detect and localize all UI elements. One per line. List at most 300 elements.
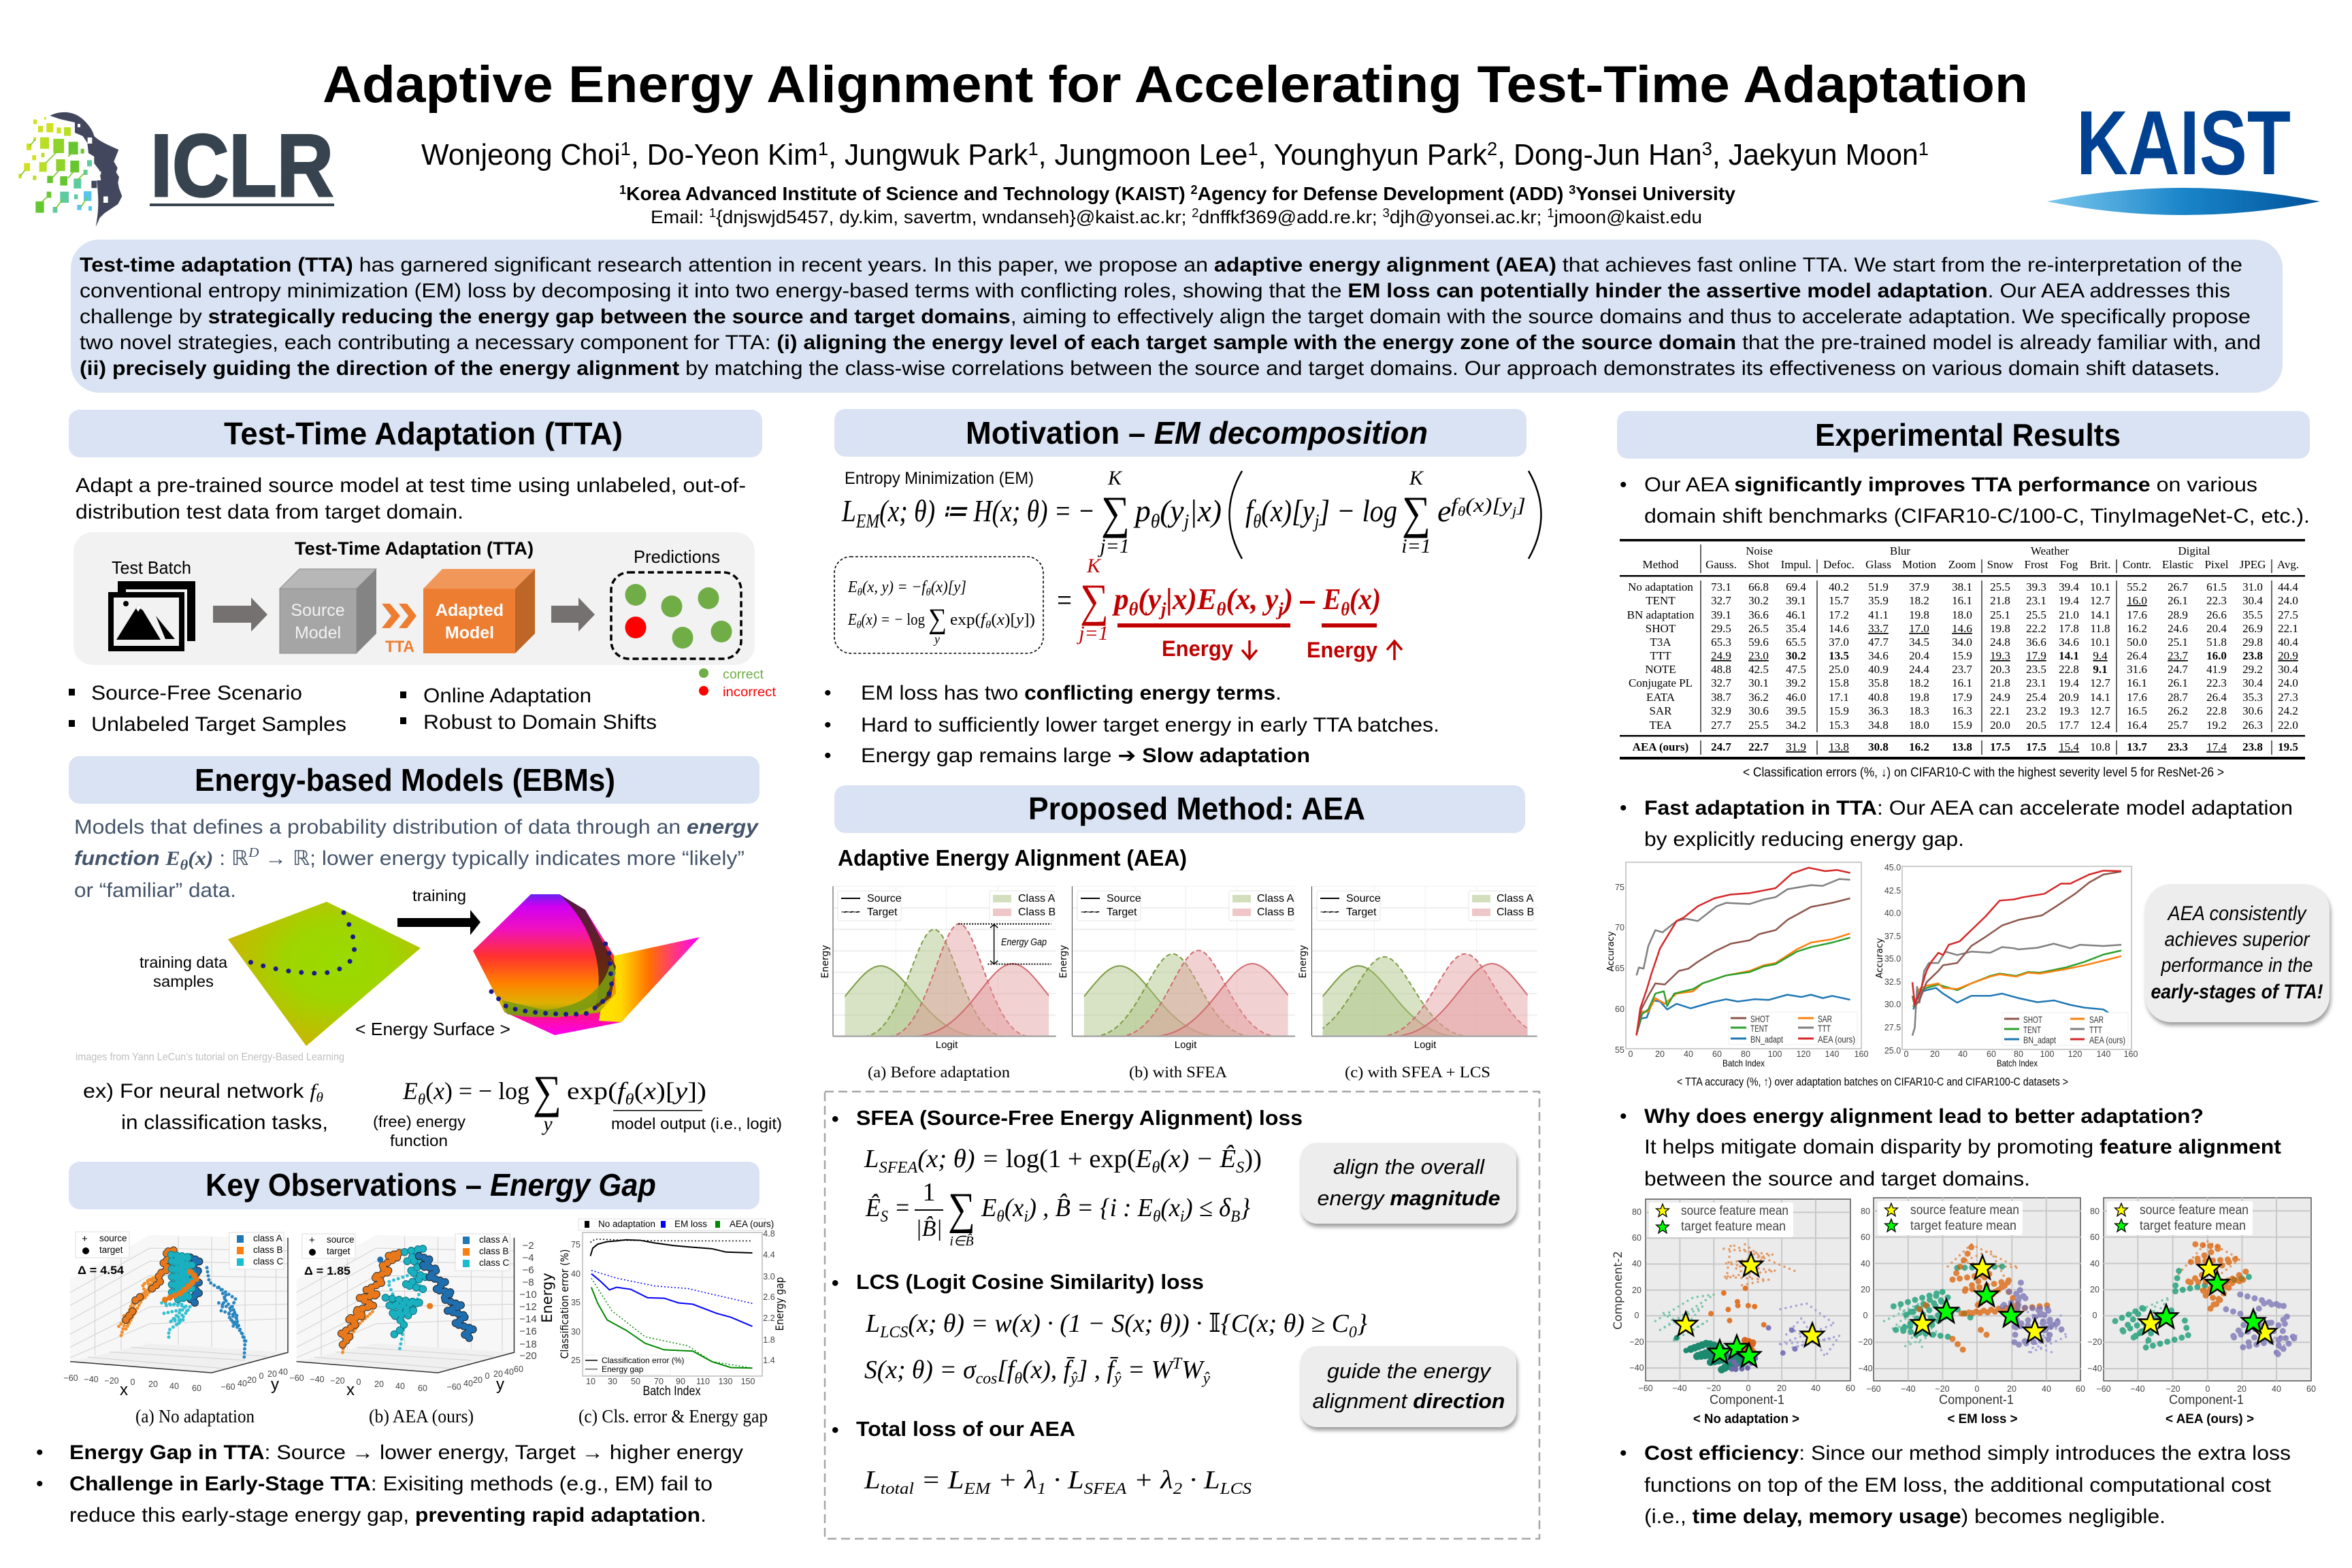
- formula: source energy estimate: Ê: [866, 1194, 881, 1222]
- legends: chart c: Class B: [1497, 906, 1534, 918]
- table: classification errors: 39.1: [1786, 594, 1806, 607]
- formula: decomposition in red: θ: [1129, 599, 1138, 619]
- table: classification errors: 17.9: [1952, 691, 1972, 704]
- formula: LCS loss: LCS: [879, 1324, 908, 1341]
- table: classification errors: Weather: [2031, 544, 2069, 557]
- table: classification errors: Digital: [2178, 544, 2210, 557]
- subheading: AEA: Adaptive Energy Alignment (AEA): [838, 845, 1187, 870]
- axis labels: [558, 1229, 786, 1399]
- formula: source energy estimate: }: [1240, 1194, 1250, 1222]
- heading: EBMs: Energy-based Models (EBMs): [195, 762, 615, 798]
- authors: , Jungmoon Lee: [1039, 138, 1247, 172]
- authors: , Dong-Jun Han: [1497, 138, 1702, 172]
- formula: SFEA loss: )): [1244, 1145, 1262, 1173]
- legend: target feature mean: [1681, 1220, 1786, 1234]
- list: key observations: Energy Gap in TTA : Source → lower energy, Target → higher energy: [69, 1441, 743, 1464]
- chart: feature scatter no adaptation: [1612, 1199, 1855, 1426]
- table: classification errors: 12.7: [2090, 676, 2110, 689]
- emails: dnffkf369@add.re.kr;: [1199, 207, 1382, 227]
- table: classification errors: 23.7: [1952, 663, 1972, 676]
- formula: EM loss: (x; θ) ≔ H(x; θ) = −: [879, 493, 1095, 528]
- formula: source energy estimate: ∑: [948, 1184, 975, 1234]
- heading: EBMs: [69, 756, 760, 804]
- axis labels: [1606, 883, 1868, 1068]
- table: classification errors: 17.4: [2206, 740, 2227, 753]
- table: classification errors: 65.5: [1786, 636, 1806, 649]
- table: classification errors: 35.4: [1786, 622, 1806, 635]
- table: classification errors: 10.1: [2090, 581, 2110, 593]
- axis ticks: 0: [485, 1371, 490, 1381]
- table: classification errors: 29.2: [2242, 663, 2263, 676]
- text: example: θ: [316, 1090, 323, 1105]
- table: classification errors: 20.9: [2059, 691, 2079, 704]
- legends: chart c: Target: [1346, 906, 1377, 918]
- axis labels: 40: [1811, 1384, 1820, 1393]
- axis labels: 0: [1629, 1049, 1633, 1059]
- formula: total loss: 2: [1173, 1480, 1182, 1498]
- axis ticks: y: [271, 1375, 279, 1394]
- affiliations: 3: [1569, 183, 1575, 197]
- text: SFEA heading: •: [832, 1108, 839, 1130]
- axis ticks: 0: [259, 1371, 264, 1381]
- table: classification errors: 34.0: [1952, 636, 1972, 649]
- formula: LCS loss: 0: [1349, 1324, 1357, 1341]
- formula: source energy estimate: i: [1180, 1208, 1184, 1226]
- title: Adaptive Energy Alignment for Accelerating Test-Time Adaptation: [323, 56, 2028, 114]
- formula: total loss: total: [881, 1480, 914, 1498]
- axis labels: 140: [1825, 1049, 1839, 1059]
- authors: 1: [818, 138, 828, 159]
- table: classification errors: 19.8: [1909, 608, 1929, 621]
- axis ticks: 40: [169, 1382, 179, 1391]
- table: classification errors: 21.0: [2059, 608, 2079, 621]
- arrow: training: [397, 887, 480, 935]
- table: classification errors: 16.1: [1952, 594, 1972, 607]
- text: cost efficiency: Cost efficiency : Since our method simply introduces the extra loss: [1644, 1442, 2291, 1465]
- axis labels: 0: [1975, 1384, 1980, 1394]
- text: total loss heading: Total loss of our AEA: [856, 1417, 1075, 1441]
- table: classification errors: 19.8: [1909, 691, 1929, 704]
- table: classification errors: 15.3: [1829, 719, 1849, 732]
- formula: EM loss: θ: [1151, 511, 1160, 532]
- formula: EM loss: ] − log: [1318, 493, 1397, 528]
- legend: source target: source: [99, 1233, 127, 1243]
- heading: experimental results: Experimental Results: [1815, 417, 2121, 453]
- axis labels: 0: [1904, 1049, 1909, 1059]
- legend: source feature mean: [2140, 1203, 2249, 1218]
- table: classification errors: 25.1: [2168, 636, 2188, 649]
- panel: abstract: (ii) precisely guiding the direction of the energy alignment by matching the class-wise correlations between the source and target domains. Our approach demonstrates its effectiveness on various domain shift datasets.: [80, 357, 2220, 380]
- formula: EM loss: i=1: [1401, 535, 1431, 557]
- authors: 1: [1918, 138, 1929, 159]
- list: TTA properties: Source-Free Scenario: [91, 682, 302, 704]
- table: classification errors: Blur: [1890, 544, 1910, 557]
- heading: proposed method: Proposed Method: AEA: [1028, 791, 1365, 826]
- icon: source model cube: Source: [291, 601, 345, 620]
- formula: SFEA loss: SFEA: [879, 1159, 918, 1177]
- authors: 1: [1028, 138, 1039, 159]
- formula: energy function: (: [425, 1077, 434, 1105]
- formula: EM loss: [841, 467, 1541, 559]
- axis labels: Accuracy: [1875, 938, 1885, 979]
- axis labels: Classification error (%): [558, 1250, 571, 1358]
- legends: chart c: Class A: [1497, 893, 1534, 904]
- formula: EM loss: p: [1135, 493, 1151, 528]
- captions: key observations figures: (a) No adaptation: [135, 1406, 255, 1426]
- panel: Experimental Results: [1606, 411, 2330, 1528]
- table: classification errors: TTT: [1650, 649, 1671, 662]
- formula: EM loss: ∑: [1101, 487, 1130, 538]
- axis labels: 80: [1861, 1207, 1870, 1216]
- callout: direction: [1301, 1346, 1516, 1427]
- table: classification errors: 15.4: [2059, 740, 2079, 753]
- table: classification errors: NOTE: [1645, 663, 1676, 676]
- box: energy definitions: θ: [857, 619, 862, 631]
- formula: cosine similarity: W: [1181, 1356, 1205, 1384]
- affiliations: 2: [1190, 183, 1198, 197]
- panel: Test-Time Adaptation: [69, 410, 777, 736]
- legend: BN_adapt: [2023, 1034, 2056, 1045]
- emails: 1: [709, 206, 716, 220]
- callout: early stages: early-stages of TTA!: [2151, 981, 2323, 1003]
- table: classification errors: 26.4: [2206, 691, 2227, 704]
- box: energy definitions: θ: [985, 619, 991, 631]
- captions: (c) with SFEA + LCS: [1345, 1064, 1490, 1081]
- axis labels: 140: [2097, 1049, 2110, 1059]
- text: fast adaptation: [1620, 797, 2293, 851]
- axis ticks: 40: [395, 1382, 405, 1391]
- table: classification errors: Conjugate PL: [1629, 676, 1693, 689]
- formula: energy function: model output (i.e., logit): [611, 1115, 782, 1132]
- axis labels: 30.0: [1884, 1000, 1901, 1009]
- table: classification errors: 30.4: [2242, 676, 2263, 689]
- logo: KAIST: [2047, 93, 2320, 215]
- formula: energy function: function: [390, 1132, 448, 1149]
- legend: classes: class B: [253, 1245, 283, 1255]
- axis labels: 40: [1632, 1259, 1642, 1269]
- formula: EM loss: K: [1107, 467, 1123, 489]
- formula: energy function: y: [541, 1113, 553, 1135]
- text: cost efficiency: (i.e., time delay, memory usage ) becomes negligible.: [1644, 1505, 2166, 1528]
- panel: loss definitions: [825, 1092, 1539, 1539]
- axis ticks: 0: [357, 1377, 361, 1387]
- axis labels: 60: [2076, 1384, 2085, 1394]
- axis labels: 40: [1684, 1049, 1693, 1059]
- text: example: ex) For neural network f: [83, 1080, 316, 1102]
- emails: djh@yonsei.ac.kr;: [1390, 207, 1547, 227]
- axis labels: Component-1: [1710, 1393, 1784, 1407]
- chart: 3D scatter no adaptation: [63, 1232, 288, 1399]
- table: classification errors: 69.4: [1786, 581, 1806, 593]
- formula: energy function: ∑: [533, 1066, 561, 1117]
- emails: 3: [1382, 206, 1390, 220]
- table: classification errors: 55.2: [2127, 581, 2147, 593]
- axis labels: −60: [1866, 1384, 1881, 1394]
- axis labels: 65: [1615, 964, 1624, 973]
- captions: key observations figures: (b) AEA (ours): [369, 1406, 474, 1426]
- table: classification errors: 20.9: [2278, 649, 2298, 662]
- table: classification errors: 17.2: [1829, 608, 1849, 621]
- formula: decomposition in red: [1057, 555, 1402, 662]
- legends: chart a: Source: [867, 893, 902, 904]
- formula: LCS loss: (x; θ) = w(x) · (1 − S(x; θ)) ·: [908, 1309, 1209, 1338]
- chart: feature scatter EM loss: [1858, 1198, 2085, 1426]
- formula: source energy estimate: (x: [1004, 1194, 1024, 1222]
- table: classification errors: 20.4: [1909, 649, 1929, 662]
- table: classification errors: 13.8: [1829, 740, 1849, 753]
- axis labels: 4.8: [763, 1229, 775, 1239]
- table: classification errors: 19.4: [2059, 594, 2079, 607]
- caption: table: < Classification errors (%, ↓) on CIFAR10-C with the highest severity level 5 for ResNet-26 >: [1743, 766, 2224, 780]
- table: classification errors: 16.0: [2127, 594, 2147, 607]
- table: classification errors: 10.8: [2090, 740, 2110, 753]
- table: classification errors: 26.2: [2168, 704, 2188, 717]
- callout: magnitude: energy magnitude: [1318, 1186, 1500, 1210]
- authors: , Younghyun Park: [1258, 138, 1488, 172]
- formula: cosine similarity: ŷ: [1201, 1370, 1210, 1388]
- legend: source target: +: [309, 1235, 315, 1246]
- axis labels: < EM loss >: [1948, 1412, 2017, 1426]
- formula: total loss: 1: [1037, 1480, 1046, 1498]
- axis ticks: x: [346, 1381, 355, 1399]
- table: classification errors: 24.8: [1990, 636, 2010, 649]
- icon: TTA chevrons: TTA: [385, 638, 414, 656]
- formula: source energy estimate: =: [888, 1194, 911, 1222]
- axis labels: 37.5: [1884, 932, 1901, 941]
- table: classification errors: 66.8: [1748, 581, 1769, 593]
- axis labels: 60: [1987, 1049, 1996, 1059]
- axis ticks: −2: [522, 1240, 534, 1252]
- axis labels: [1875, 863, 2138, 1068]
- formula: EM loss: f: [1451, 494, 1456, 517]
- table: classification errors: 40.4: [2278, 636, 2298, 649]
- formula: SFEA loss: L: [864, 1145, 879, 1173]
- table: classification errors: Defoc.: [1823, 558, 1855, 571]
- table: classification errors: Snow: [1987, 558, 2014, 571]
- axis ticks: [289, 1240, 555, 1399]
- table: classification errors: 26.5: [1748, 622, 1769, 635]
- table: classification errors: 17.1: [1829, 691, 1849, 704]
- text: TTA definition: Adapt a pre-trained source model at test time using unlabeled, out-of-: [76, 474, 746, 497]
- axis labels: 160: [1855, 1049, 1868, 1059]
- table: classification errors: 47.5: [1786, 663, 1806, 676]
- table: classification errors: 24.7: [1711, 740, 1731, 753]
- table: classification errors: 26.7: [2168, 581, 2188, 593]
- formula: decomposition in red: (x): [1350, 583, 1381, 616]
- table: classification errors: 16.2: [1909, 740, 1929, 753]
- axis labels: 35.0: [1884, 954, 1901, 964]
- table: classification errors: SAR: [1649, 704, 1672, 717]
- text: why energy alignment: [1620, 1105, 2281, 1190]
- legend: correct / incorrect: [699, 668, 777, 700]
- axis labels: 1.8: [763, 1335, 775, 1345]
- table: classification errors: 24.2: [2278, 704, 2298, 717]
- chart group: energy distributions: [821, 886, 1537, 1081]
- table: classification errors: 65.3: [1711, 636, 1731, 649]
- legend: classes: class A: [479, 1235, 508, 1245]
- table: classification errors: 13.7: [2127, 740, 2147, 753]
- text: EBM definition: function E: [74, 847, 179, 870]
- legends: chart b: Source: [1107, 893, 1141, 904]
- table: classification errors: Avg.: [2277, 558, 2299, 571]
- table: classification errors: 16.4: [2127, 719, 2147, 732]
- legend: methods: [578, 1219, 774, 1230]
- table: classification errors: 24.9: [1711, 649, 1731, 662]
- table: classification errors: 34.6: [1868, 649, 1889, 662]
- formula: source energy estimate: θ: [996, 1208, 1004, 1226]
- text: EBM definition: : ℝ: [219, 847, 246, 870]
- list: EM problems: EM loss has two conflicting energy terms .: [861, 682, 1281, 704]
- text: EBM definition: → ℝ; lower energy typically indicates more “likely”: [259, 847, 745, 870]
- list: key observations: [36, 1441, 743, 1526]
- captions: (b) with SFEA: [1129, 1064, 1227, 1081]
- formula: cosine similarity: S(x; θ) = σ: [864, 1356, 977, 1384]
- axis labels: 70: [654, 1377, 664, 1386]
- axis labels: 3.0: [763, 1272, 775, 1281]
- formula: energy function: [373, 1066, 782, 1149]
- axis labels: −20: [1935, 1384, 1950, 1394]
- table: classification errors: Method: [1643, 558, 1679, 571]
- table: classification errors: 27.7: [1711, 719, 1731, 732]
- table: classification errors: Glass: [1865, 558, 1891, 571]
- legend: target feature mean: [1910, 1219, 2016, 1233]
- chart: 3D scatter AEA: [289, 1234, 555, 1399]
- formula: cosine similarity: ] , f̄: [1077, 1356, 1119, 1384]
- axis labels: Component-1: [1939, 1393, 2014, 1407]
- table: classification errors: 59.6: [1748, 636, 1769, 649]
- table: classification errors: TEA: [1649, 719, 1672, 732]
- heading: motivation: [834, 409, 1526, 457]
- formula: EM loss: (x)[y: [1465, 494, 1513, 517]
- table: classification errors: 38.1: [1952, 581, 1972, 593]
- arrow: training: training: [412, 887, 466, 904]
- axis labels: 40: [2090, 1259, 2100, 1269]
- table: classification errors: 35.5: [2242, 608, 2263, 621]
- legend: TTT: [2089, 1024, 2102, 1035]
- arrow: model to predictions: [551, 598, 595, 632]
- table: classification errors: 22.0: [2278, 719, 2298, 732]
- table: classification errors: 31.6: [2127, 663, 2147, 676]
- axis labels: 45.0: [1884, 863, 1901, 872]
- formula: EM loss: θ: [1458, 504, 1466, 519]
- formula: decomposition in red: Energy: [1307, 638, 1377, 662]
- formula: source energy estimate: [865, 1178, 1250, 1249]
- axis labels: 150: [741, 1377, 755, 1386]
- formula: EM loss: j: [1313, 511, 1320, 532]
- box: energy definitions: (: [991, 611, 997, 629]
- table: classification errors: EATA: [1646, 691, 1676, 704]
- table: classification errors: 23.2: [2026, 704, 2046, 717]
- formula: EM loss: f: [1245, 493, 1254, 528]
- formula: decomposition in red: j: [1158, 599, 1166, 619]
- table: classification errors: 32.7: [1711, 676, 1731, 689]
- axis labels: 110: [696, 1377, 710, 1386]
- legend: source target: +: [82, 1233, 88, 1245]
- table: classification errors: 20.5: [2026, 719, 2046, 732]
- formula: EM loss: j=1: [1097, 535, 1130, 557]
- table: classification errors: 30.8: [1868, 740, 1889, 753]
- text: EBM definition: [74, 816, 759, 902]
- table: classification errors: 16.2: [2127, 622, 2147, 635]
- chart: 3D scatter no adaptation: Δ = 4.54: [78, 1264, 125, 1277]
- table: classification errors: JPEG: [2240, 558, 2266, 571]
- legend: methods: No adaptation: [598, 1219, 655, 1229]
- text: why energy alignment: It helps mitigate domain disparity by promoting feature alignment: [1644, 1136, 2281, 1158]
- table: classification errors: 23.8: [2242, 740, 2263, 753]
- chart: CIFAR100-C accuracy: [1875, 863, 2138, 1068]
- table: classification errors: 17.5: [1990, 740, 2010, 753]
- axis labels: −40: [1672, 1384, 1687, 1393]
- formula: source energy estimate: θ: [1153, 1208, 1161, 1226]
- legends: chart b: Class B: [1257, 906, 1294, 918]
- formula: source energy estimate: ) ≤ δ: [1183, 1194, 1231, 1222]
- callout: early stages: AEA consistently: [2167, 902, 2307, 925]
- table: classification errors: 24.0: [2278, 594, 2298, 607]
- box: energy definitions: θ: [926, 587, 931, 598]
- formula: total loss: L: [864, 1466, 879, 1494]
- text: why energy alignment: Why does energy alignment lead to better adaptation?: [1644, 1105, 2204, 1128]
- axis labels: [2087, 1207, 2316, 1426]
- legend: source feature mean: [1681, 1204, 1788, 1218]
- table: classification errors: 12.7: [2090, 594, 2110, 607]
- table: classification errors: 24.6: [2168, 622, 2188, 635]
- formula: total loss: = L: [914, 1466, 964, 1494]
- image: flat energy surface: [228, 902, 421, 1046]
- table: classification errors: 17.5: [2026, 740, 2046, 753]
- legends: chart c: [1317, 891, 1534, 921]
- affiliations: Agency for Defense Development (ADD): [1198, 183, 1569, 204]
- heading: key observations: Key Observations – Energy Gap: [206, 1167, 656, 1203]
- legend: classes: class A: [253, 1233, 282, 1243]
- axis ticks: y: [496, 1375, 504, 1394]
- text: cost efficiency: •: [1620, 1442, 1627, 1465]
- box: energy definitions: (x)[y]: [931, 578, 966, 596]
- table: classification errors: 40.9: [1868, 663, 1889, 676]
- legend: classes: class C: [253, 1256, 284, 1267]
- formula: cosine similarity: ŷ: [1113, 1370, 1122, 1388]
- table: classification errors: 16.5: [2127, 704, 2147, 717]
- diagram: TTA pipeline: [74, 532, 755, 665]
- table: classification errors: SHOT: [1646, 622, 1676, 635]
- axis labels: 60: [1632, 1233, 1642, 1243]
- axis labels: 2.2: [763, 1313, 775, 1323]
- axis labels: −40: [1901, 1384, 1916, 1394]
- table: classification errors: 17.7: [2059, 719, 2079, 732]
- legend: line styles: Energy gap: [602, 1365, 644, 1374]
- axis labels: 60: [1846, 1384, 1855, 1393]
- panel: abstract: Test-time adaptation (TTA) has garnered significant research attention in recent years. In this paper, we propose an adaptive energy alignment (AEA) that achieves fast online TTA. We start from the re-interpretation of the: [80, 254, 2242, 276]
- text: EBM definition: Models that defines a probability distribution of data through an energy: [74, 816, 759, 838]
- axis labels: 100: [2040, 1049, 2054, 1059]
- table: classification errors: 36.2: [1748, 691, 1769, 704]
- axis labels: 40: [1861, 1259, 1870, 1269]
- axis labels: 20: [1930, 1049, 1940, 1059]
- formula: LCS loss: }: [1357, 1309, 1367, 1338]
- axis ticks: −12: [519, 1301, 537, 1313]
- text: fast adaptation: by explicitly reducing energy gap.: [1644, 828, 1964, 851]
- legend: [2107, 1201, 2253, 1235]
- formula: energy function: exp( f: [567, 1077, 624, 1105]
- table: classification errors: 32.9: [1711, 704, 1731, 717]
- axis ticks: Energy: [539, 1273, 555, 1323]
- axis labels: −20: [1858, 1337, 1873, 1347]
- table: classification errors: 16.0: [2206, 649, 2227, 662]
- table: classification errors: 23.1: [2026, 594, 2046, 607]
- table: classification errors: TENT: [1646, 594, 1676, 607]
- table: classification errors: 36.3: [1868, 704, 1889, 717]
- axis labels: Energy: [1058, 945, 1069, 979]
- formula: EM loss: j: [1182, 511, 1189, 532]
